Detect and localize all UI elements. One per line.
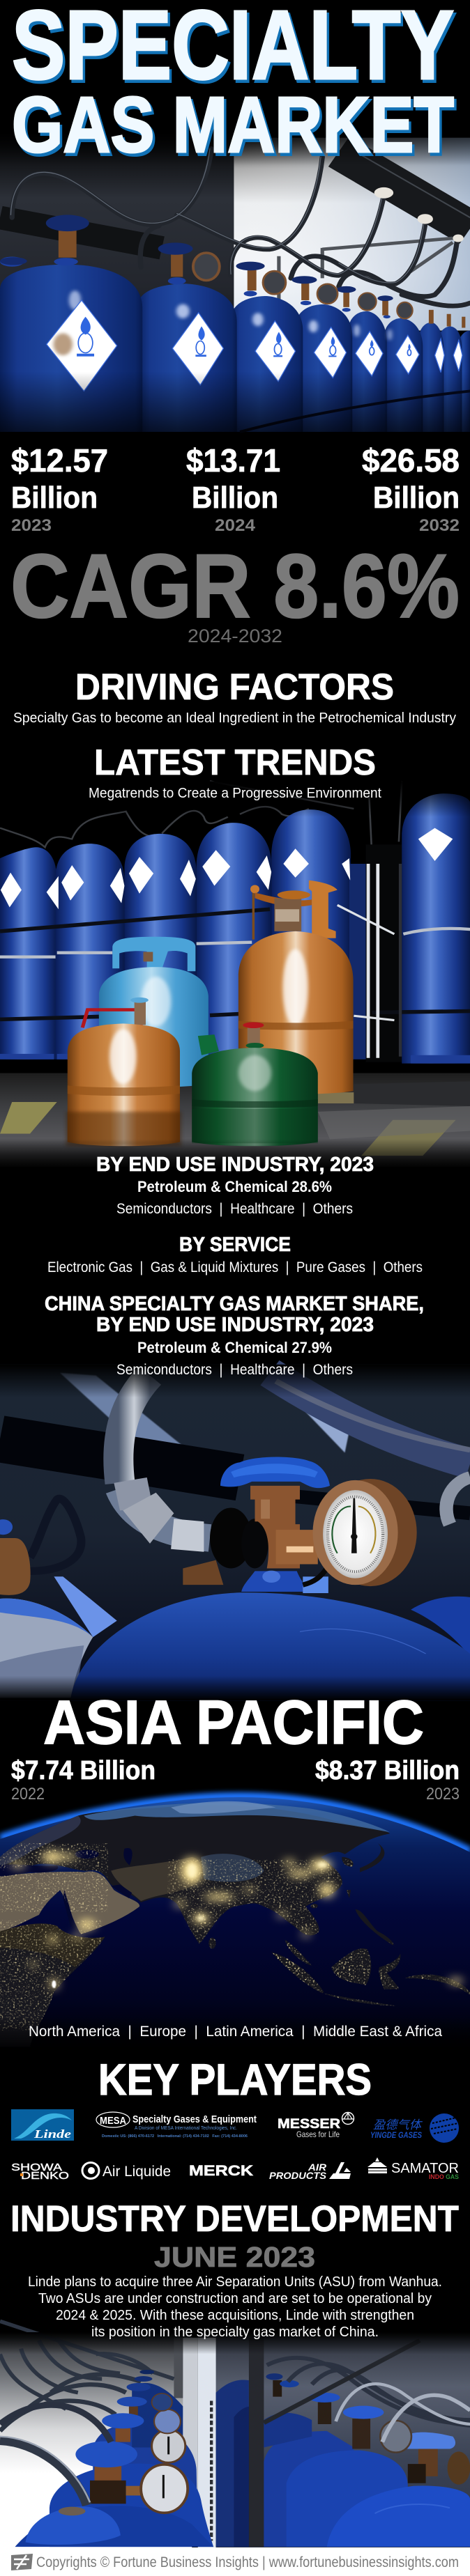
regional stat: 2022 (11, 1756, 156, 1803)
neck collars (0, 257, 391, 318)
heading: latest trends: LATEST TRENDS (94, 743, 376, 783)
black coupling (210, 1507, 252, 1568)
panel: valve and gauge close-up image (0, 1365, 470, 1700)
leading segment share: Petroleum & Chemical 28.6% (137, 1178, 332, 1195)
logo: MESA Specialty Gases & Equipment: A Division of MESA International Technologies, Inc. (135, 2126, 237, 2131)
logo: Messer (278, 2112, 354, 2139)
driving factors text: Specialty Gas to become an Ideal Ingredient in the Petrochemical Industry (13, 710, 457, 726)
floor (0, 1073, 470, 1167)
regional stat: 2022: $7.74 Billion (11, 1756, 156, 1785)
logo: Samator Indo Gas: INDO GAS (429, 2173, 459, 2180)
latest trends text: Megatrends to Create a Progressive Environment (89, 785, 381, 801)
development description (28, 2274, 442, 2340)
China share heading: BY END USE INDUSTRY, 2023 (96, 1314, 374, 1336)
logo: Showa Denko: DENKO (21, 2170, 69, 2182)
logo: MESA Specialty Gases & Equipment: Domestic US: (866) 470-6172 International: (714) 434-7102 Fax: (714) 434-8006 (102, 2134, 248, 2139)
ocean (0, 1797, 470, 2053)
service segments: Electronic Gas | Gas & Liquid Mixtures | Pure Gases | Others (47, 1259, 423, 1275)
logo: MESA Specialty Gases & Equipment: Specialty Gases & Equipment (132, 2113, 257, 2125)
footer logo (11, 2554, 33, 2570)
other segments: Semiconductors | Healthcare | Others (116, 1201, 353, 1217)
development description: Two ASUs are under construction and are set to be operational by (38, 2290, 432, 2306)
market size stat: 2024 (186, 442, 280, 535)
diamond hazard labels (47, 300, 462, 391)
logo: Air Products: AIR (308, 2162, 327, 2173)
cylinders, rear to front (459, 330, 470, 432)
title (12, 0, 456, 171)
logo: Air Products (269, 2162, 351, 2181)
other regions: North America | Europe | Latin America | Middle East & Africa (29, 2024, 442, 2040)
background left cylinder (0, 1599, 93, 1698)
blue cylinder wall (0, 847, 57, 1060)
white hazard diamonds (1, 828, 453, 909)
city lights glow (10, 1852, 462, 1989)
logo: Air Liquide: Air Liquide (103, 2164, 171, 2180)
China leading segment share: Petroleum & Chemical 27.9% (137, 1339, 332, 1356)
orange bottle, large (238, 880, 354, 1094)
pressure gauge (312, 1479, 417, 1586)
orange bottle, small, red handle (66, 998, 181, 1146)
valves (59, 226, 465, 328)
gauges (193, 253, 413, 318)
development description: its position in the specialty gas market of China. (91, 2324, 379, 2340)
development description: 2024 & 2025. With these acquisitions, Linde with strengthen (56, 2307, 414, 2323)
panel: earth at night map (0, 1797, 470, 2053)
hoses (10, 149, 470, 306)
logo: MESA Specialty Gases & Equipment: MESA (100, 2115, 126, 2127)
footer bar (0, 2547, 470, 2576)
heading: driving factors: DRIVING FACTORS (75, 667, 394, 708)
inland seas (0, 1848, 132, 1933)
heading: key players: KEY PLAYERS (98, 2056, 372, 2104)
China other segments: Semiconductors | Healthcare | Others (116, 1362, 353, 1378)
segment heading: by service: BY SERVICE (179, 1234, 291, 1256)
development description: Linde plans to acquire three Air Separation Units (ASU) from Wanhua. (28, 2274, 442, 2290)
silver pipe (119, 1376, 150, 1483)
right valves (418, 2449, 438, 2476)
logo: Samator Indo Gas (367, 2157, 459, 2180)
heading: Asia Pacific: ASIA PACIFIC (43, 1687, 424, 1757)
right hoses (267, 2358, 470, 2426)
logo: Showa Denko (11, 2162, 69, 2182)
left gauges (141, 2393, 188, 2513)
logo: Merck: MERCK (189, 2163, 253, 2179)
panel: cylinder rows image (0, 2321, 470, 2549)
brass stem (250, 1486, 300, 1568)
regional stat: 2023 (315, 1756, 460, 1803)
front left cylinder body (50, 2464, 213, 2547)
development date: JUNE 2023 (154, 2241, 315, 2273)
left cylinders (93, 2423, 198, 2546)
logo: Linde: Linde (33, 2127, 72, 2141)
panel: hero image of blue gas cylinders (0, 130, 470, 454)
market size stat: 2023 (11, 442, 108, 535)
cylinder feet (0, 1054, 470, 1064)
segment heading: by end use industry: BY END USE INDUSTRY, 2023 (96, 1154, 374, 1176)
left hose loop and valve (30, 1498, 81, 1571)
market size stat: 2032: 2032 (419, 516, 460, 535)
market size stat: 2023: 2023 (11, 516, 52, 535)
near wheel and chrome hoses (26, 2506, 121, 2545)
logo: Yingde Gases: 盈德气体 (373, 2118, 423, 2132)
green bottle (192, 1022, 318, 1146)
back pipes (0, 781, 402, 853)
market size stat: 2024: 2024 (215, 516, 256, 535)
regional stat: 2023: 2023 (426, 1785, 460, 1803)
back hoses left (0, 2321, 174, 2409)
logo: Yingde Gases (370, 2113, 459, 2143)
regional stat: 2023: $8.37 Billion (315, 1756, 460, 1785)
city lights speckle (0, 1843, 470, 2031)
logo: Linde (11, 2109, 74, 2141)
logo: Messer: MESSER (278, 2117, 340, 2132)
market size stat: 2023: $12.57 (11, 442, 108, 479)
light blue bottle (99, 937, 209, 1087)
market size stat: 2023: Billion (11, 481, 98, 515)
logo: Yingde Gases: YINGDE GASES (370, 2130, 422, 2140)
panel: coloured gas bottles image (0, 781, 470, 1170)
CAGR period: 2024-2032 (188, 626, 282, 646)
cylinder highlights (69, 290, 392, 340)
blue valve wheel (220, 1457, 330, 1488)
China share heading: CHINA SPECIALTY GAS MARKET SHARE, (45, 1293, 424, 1315)
market size stat: 2032 (362, 442, 460, 535)
logo: Samator Indo Gas: SAMATOR (391, 2161, 459, 2176)
logo: Messer: Gases for Life (296, 2129, 340, 2139)
market size stat: 2032: $26.58 (362, 442, 460, 479)
blue collar (241, 1571, 306, 1592)
right cylinders (216, 2380, 249, 2547)
logo: Showa Denko: SHOWA (11, 2162, 62, 2173)
big cylinder dome (70, 1592, 470, 1700)
China share heading (45, 1293, 424, 1336)
bands and rails (0, 864, 470, 1058)
regional stat: 2022: 2022 (11, 1785, 45, 1803)
atmosphere glow (0, 1797, 470, 1852)
left valves (94, 2465, 121, 2502)
right cylinder (411, 1597, 470, 1656)
logo: Air Products: PRODUCTS (269, 2170, 327, 2181)
market size stat: 2024: Billion (192, 481, 278, 515)
cylinder reflection band (240, 391, 470, 432)
logo: MESA Specialty Gases & Equipment (96, 2112, 257, 2139)
market size stat: 2032: Billion (373, 481, 460, 515)
market size stat: 2024: $13.71 (186, 442, 280, 479)
